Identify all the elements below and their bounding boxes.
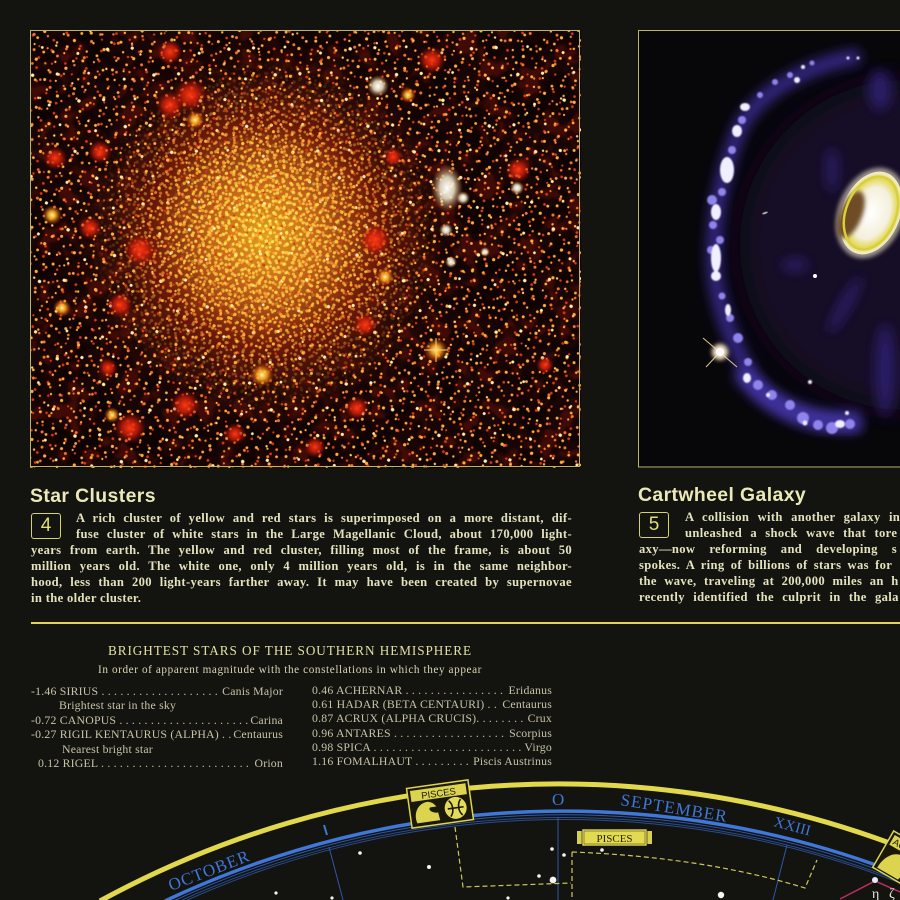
table: brightest stars column 2: Virgo [524, 740, 552, 754]
table: brightest stars column 2: Eridanus [508, 683, 552, 697]
text block: cartwheel galaxy: unleashed a shock wave that tore [685, 526, 897, 540]
table: brightest stars column 2: Centaurus [502, 697, 552, 711]
text block: star clusters: million years old. The white one, only 4 million years old, is in the same neighbor- [31, 559, 572, 573]
heading: cartwheel galaxy: Cartwheel Galaxy [638, 484, 806, 506]
meridian lines [324, 817, 787, 900]
star chart [98, 779, 900, 900]
zodiac badge: pisces [407, 780, 473, 828]
table: brightest stars column 1: Canis Major [222, 684, 283, 698]
constellation boundaries [455, 827, 817, 900]
month and numeral labels: XXIII [772, 814, 812, 840]
text block: cartwheel galaxy [639, 510, 900, 604]
text block: cartwheel galaxy: axy—now reforming and developing s [639, 542, 897, 556]
text block: star clusters: A rich cluster of yellow and red stars is superimposed on a more distant, dif- [76, 511, 572, 525]
table: brightest stars column 1: Nearest bright star [62, 742, 153, 756]
photo: cartwheel galaxy [638, 30, 900, 468]
pisces label [577, 829, 652, 846]
text block: cartwheel galaxy: the wave, traveling at 200,000 miles an h [639, 574, 899, 588]
table subheading: In order of apparent magnitude with the constellations in which they appear [98, 664, 482, 676]
text block: star clusters: in the older cluster. [31, 591, 141, 605]
month and numeral labels: OCTOBER [166, 846, 253, 895]
table: brightest stars column 1: Brightest star in the sky [59, 698, 176, 712]
number badge 5: 5 [649, 514, 659, 535]
text block: star clusters [31, 511, 572, 605]
ring haze [714, 56, 860, 425]
zodiac badge: pisces: PISCES [421, 786, 457, 802]
text block: cartwheel galaxy: recently identified the culprit in the gala [639, 590, 899, 604]
table: brightest stars column 1: Carina [250, 713, 283, 727]
text block: star clusters: fuse cluster of white stars in the Large Magellanic Cloud, about 170,000 light- [76, 527, 572, 541]
photo: star clusters [30, 30, 581, 468]
heading: star clusters: Star Clusters [30, 485, 156, 507]
ecliptic arcs [100, 784, 900, 900]
text block: star clusters: years from earth. The yellow and red cluster, filling most of the frame, is about 50 [31, 543, 572, 557]
table: brightest stars column 1 [31, 684, 283, 770]
month and numeral labels: SEPTEMBER [619, 790, 729, 826]
table: brightest stars column 2: Crux [528, 711, 552, 725]
number badge 5 [639, 512, 669, 538]
table: brightest stars column 2: Scorpius [509, 726, 552, 740]
table: brightest stars column 2 [312, 683, 552, 768]
text block: cartwheel galaxy: spokes. A ring of billions of stars was for [639, 558, 892, 572]
stars [274, 847, 724, 900]
number badge 4: 4 [41, 515, 51, 536]
nucleus [823, 157, 900, 269]
aquarius stick figure [840, 877, 900, 900]
zodiac badge: aquarius [873, 831, 900, 895]
number badge 4 [31, 513, 61, 539]
table heading: BRIGHTEST STARS OF THE SOUTHERN HEMISPHERE [108, 643, 472, 658]
bright foreground star [703, 338, 737, 367]
divider rule [31, 622, 900, 624]
table: brightest stars column 1: Orion [254, 756, 283, 770]
text block: star clusters: hood, less than 200 light-years farther away. It may have been created by supernovae [31, 575, 572, 589]
month and numeral labels [166, 790, 812, 895]
month and numeral labels: O [552, 790, 564, 809]
table: brightest stars column 1: Centaurus [233, 727, 283, 741]
ring knots [707, 60, 855, 434]
table: brightest stars column 2: Piscis Austrinus [473, 754, 552, 768]
text block: cartwheel galaxy: A collision with another galaxy in [685, 510, 900, 524]
pisces label: PISCES [596, 833, 633, 845]
